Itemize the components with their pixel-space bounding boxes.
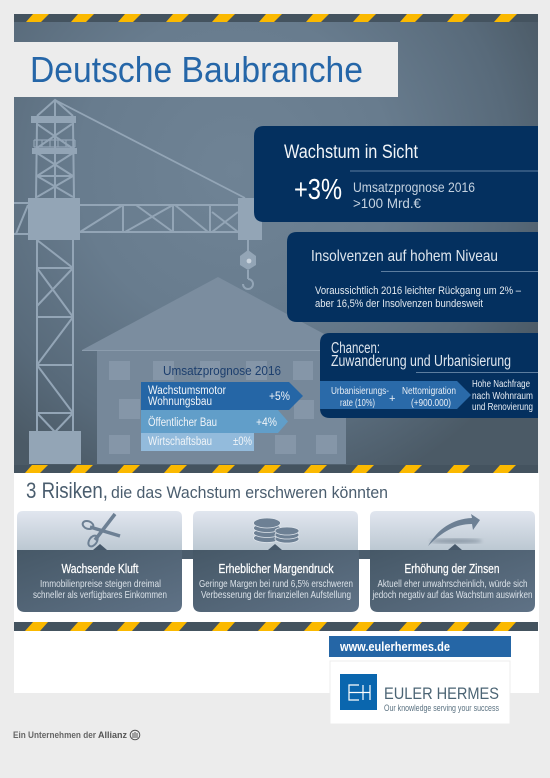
logo: Euler Hermes: EULER HERMES [384, 684, 499, 703]
panel: Insolvenzen: aber 16,5% der Insolvenzen bundesweit [315, 298, 483, 310]
icon: scissors [82, 514, 120, 548]
hazard stripe: middle [14, 465, 538, 473]
panel: Wachsende Kluft: Wachsende Kluft [62, 562, 139, 576]
panel: Erheblicher Margendruck: Verbesserung der finanziellen Aufstellung [201, 589, 351, 601]
bar chart: Umsatzprognose 2016: ±0% [233, 436, 252, 448]
title band [14, 42, 398, 97]
panel: Wachstum in Sicht [254, 126, 538, 222]
hero background panel [14, 14, 538, 466]
panel: Wachstum in Sicht: >100 Mrd.€ [353, 196, 421, 211]
panel: Wachsende Kluft [17, 511, 182, 612]
panel: Insolvenzen: Voraussichtlich 2016 leichter Rückgang um 2% – [315, 285, 522, 297]
panel: Wachstum in Sicht: Umsatzprognose 2016 [353, 180, 475, 195]
panel: Wachstum in Sicht: +3% [294, 174, 342, 206]
panel: Wachsende Kluft: schneller als verfügbares Einkommen [33, 589, 167, 601]
logo: Euler Hermes [330, 661, 510, 724]
website bar: www.eulerhermes.de [339, 640, 450, 654]
bar chart: Umsatzprognose 2016: Öffentlicher Bau [148, 417, 217, 429]
hazard stripe: bottom [14, 622, 538, 631]
footer: Allianz note: Ein Unternehmen der [13, 730, 96, 740]
panel: Chancen: (+900.000) [411, 397, 451, 409]
panel: Chancen: Nettomigration [402, 385, 456, 397]
website bar [329, 636, 511, 657]
white lower panel [14, 473, 539, 693]
heading: 3 Risiken [26, 478, 388, 503]
illustration: crane [14, 100, 262, 464]
panel: Chancen: Hohe Nachfrage [472, 378, 530, 390]
panel: Erheblicher Margendruck [193, 511, 359, 612]
hazard stripe: top [14, 14, 538, 22]
heading: 3 Risiken: 3 Risiken, [26, 478, 108, 503]
panel: Erhöhung der Zinsen [370, 511, 535, 612]
footer: Allianz note [13, 730, 140, 741]
bar chart: Umsatzprognose 2016: Wirtschaftsbau [148, 436, 212, 448]
panel: Wachsende Kluft: Immobilienpreise steigen dreimal [40, 578, 161, 590]
heading: 3 Risiken: die das Wachstum erschweren könnten [111, 483, 388, 502]
bar chart: Umsatzprognose 2016: Umsatzprognose 2016 [163, 363, 281, 378]
panel: Chancen: Zuwanderung und Urbanisierung [331, 353, 511, 370]
panel: Insolvenzen: Insolvenzen auf hohem Niveau [311, 248, 498, 265]
panel: Wachstum in Sicht: Wachstum in Sicht [284, 142, 419, 163]
panel: Chancen: Chancen: [331, 340, 380, 357]
icon: crane hook [240, 240, 256, 289]
title band: Deutsche Baubranche [30, 49, 363, 90]
panel: Chancen: und Renovierung [472, 401, 533, 413]
bar chart: Umsatzprognose 2016: +5% [269, 391, 290, 403]
icon: coins [254, 518, 299, 543]
footer: Allianz note: Allianz [98, 730, 127, 741]
panel: Chancen: Urbanisierungs- [331, 385, 389, 397]
logo: Euler Hermes: Our knowledge serving your success [384, 703, 499, 714]
icon: rising arrow [428, 514, 482, 546]
panel: Insolvenzen [287, 232, 538, 322]
bar chart: Umsatzprognose 2016: +4% [256, 417, 277, 429]
panel: Chancen [320, 333, 538, 418]
illustration: house [82, 277, 354, 464]
panel: Erheblicher Margendruck: Erheblicher Margendruck [218, 562, 334, 576]
panel: Chancen: nach Wohnraum [472, 390, 533, 402]
connector band between risk cards [182, 550, 370, 559]
panel: Erhöhung der Zinsen: Erhöhung der Zinsen [404, 562, 500, 576]
bar chart: Umsatzprognose 2016: Wachstumsmotor [148, 385, 226, 397]
panel: Chancen: + [389, 393, 395, 405]
bar chart: Umsatzprognose 2016 [141, 363, 303, 451]
panel: Chancen: rate (10%) [340, 397, 375, 409]
bar chart: Umsatzprognose 2016: Wohnungsbau [148, 396, 212, 408]
panel: Erheblicher Margendruck: Geringe Margen bei rund 6,5% erschweren [199, 578, 353, 590]
